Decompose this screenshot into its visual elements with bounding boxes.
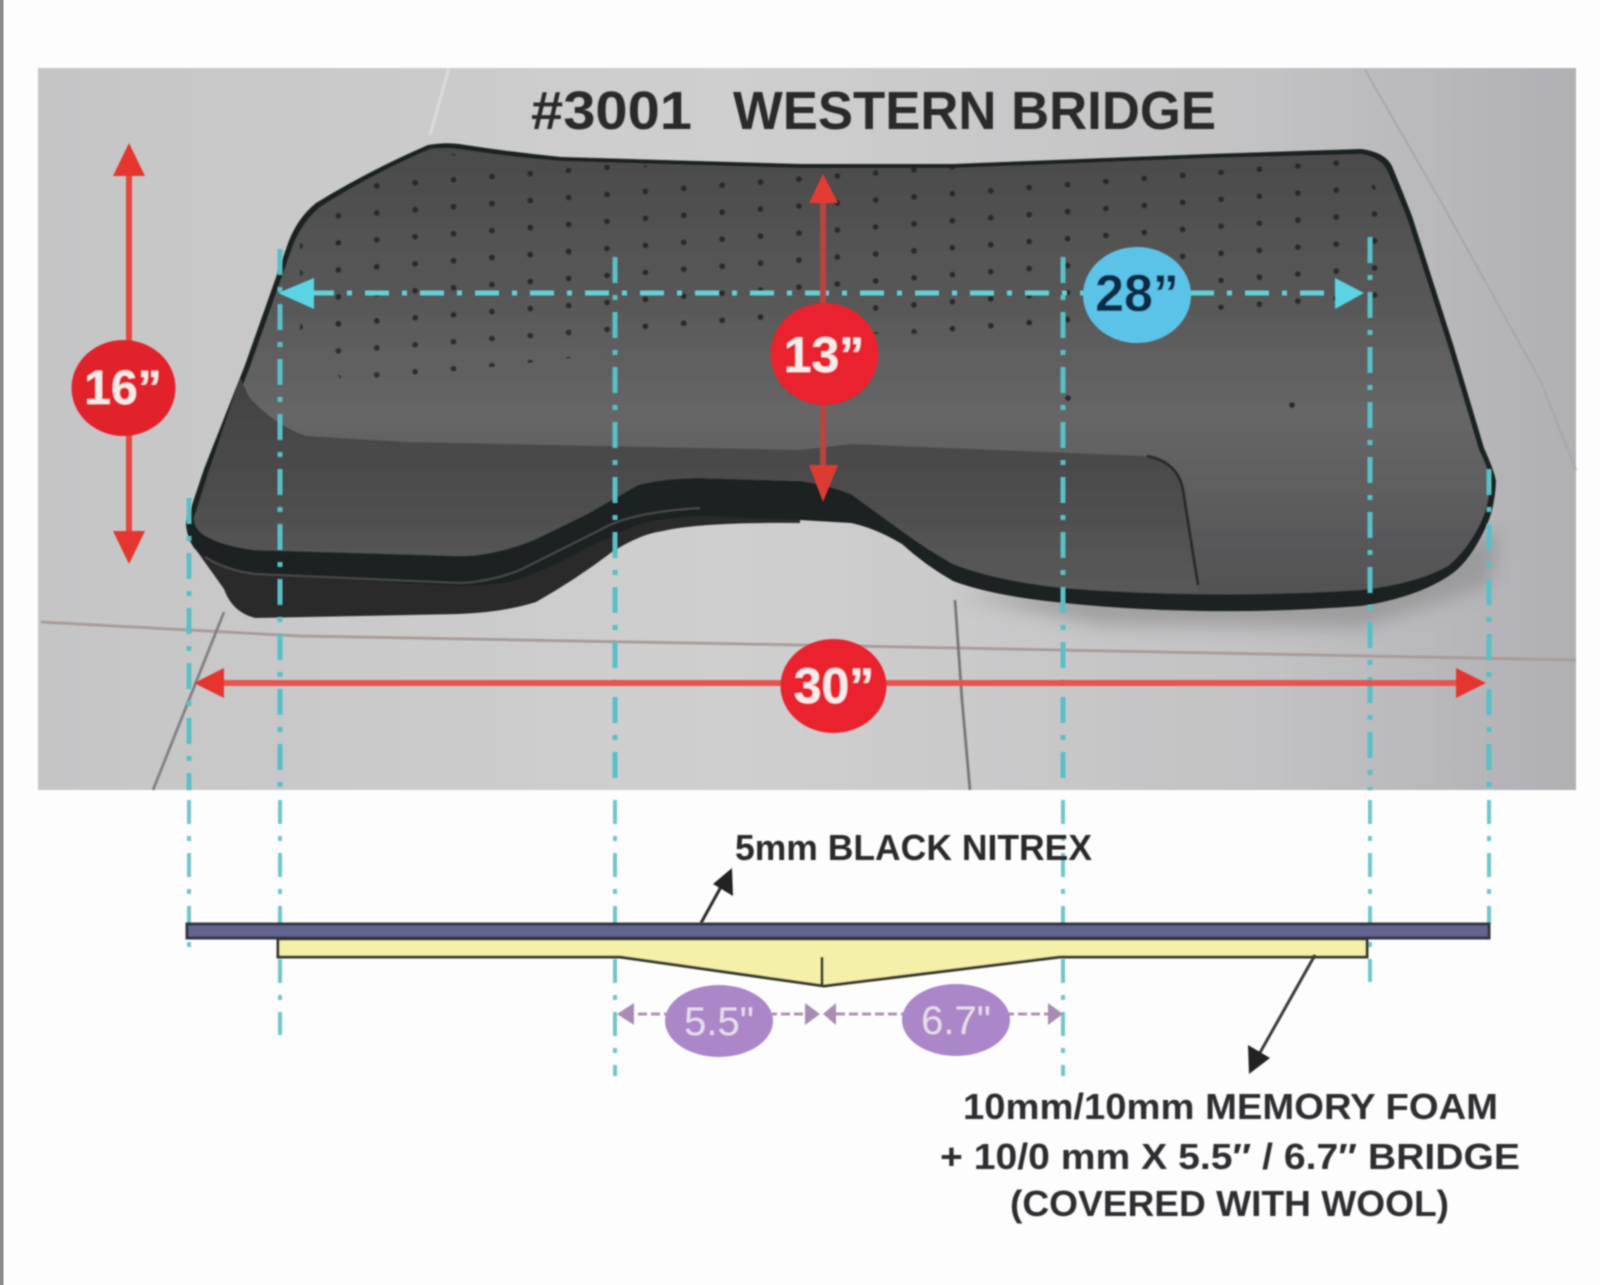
title [531,81,1216,141]
lower pad layer [189,490,800,618]
dimension: 28 inch width: 28” [1095,265,1179,323]
label: 5mm black nitrex: 5mm BLACK NITREX [735,827,1092,868]
dimension: 30 inch width [194,639,1486,733]
dimension: 6.7 inch bridge [823,984,1063,1056]
dimension: 5.5 inch bridge: 5.5" [684,1000,754,1044]
title: WESTERN BRIDGE [733,81,1216,141]
saddle pad [185,142,1497,619]
floor background [38,68,1576,790]
dimension: 16 inch height [72,143,176,564]
stray perforations [1065,395,1071,401]
wool and memory foam layer [278,939,1367,986]
guide lines: vertical cyan dash-dot on photo [189,237,1489,790]
label: memory foam: 10mm/10mm MEMORY FOAM [963,1086,1498,1127]
panel: product photo [38,68,1576,790]
left page edge [0,0,4,1285]
dimension: 13 inch height: 13” [784,327,864,383]
pad shadow [960,530,1500,628]
guide lines: vertical dash-dot below photo [189,800,1489,1076]
dimension: 28 inch width [278,247,1364,343]
label: 5mm black nitrex [701,827,1092,923]
dimension: 5.5 inch bridge [617,985,820,1057]
label: memory foam [940,955,1520,1224]
title: #3001 [531,81,692,141]
label: memory foam: (COVERED WITH WOOL) [1010,1183,1449,1224]
dimension: 6.7 inch bridge: 6.7" [921,999,991,1043]
dimension: 16 inch height: 16” [84,362,162,415]
layer separator [205,508,700,583]
bridge centre divider [820,957,824,986]
perforation dots [300,154,1378,379]
dimension: 13 inch height [770,174,878,502]
label: memory foam: + 10/0 mm X 5.5″ / 6.7″ BRIDGE [940,1136,1520,1177]
crease line [1147,456,1198,585]
upper pad rim [186,143,1496,611]
dimension: 30 inch width: 30” [794,658,874,714]
floor tile joints [41,68,1576,790]
nitrex layer [187,924,1489,938]
cross-section diagram [187,924,1489,986]
upper pad face [194,148,1490,594]
lower saddle panel [194,378,1198,592]
